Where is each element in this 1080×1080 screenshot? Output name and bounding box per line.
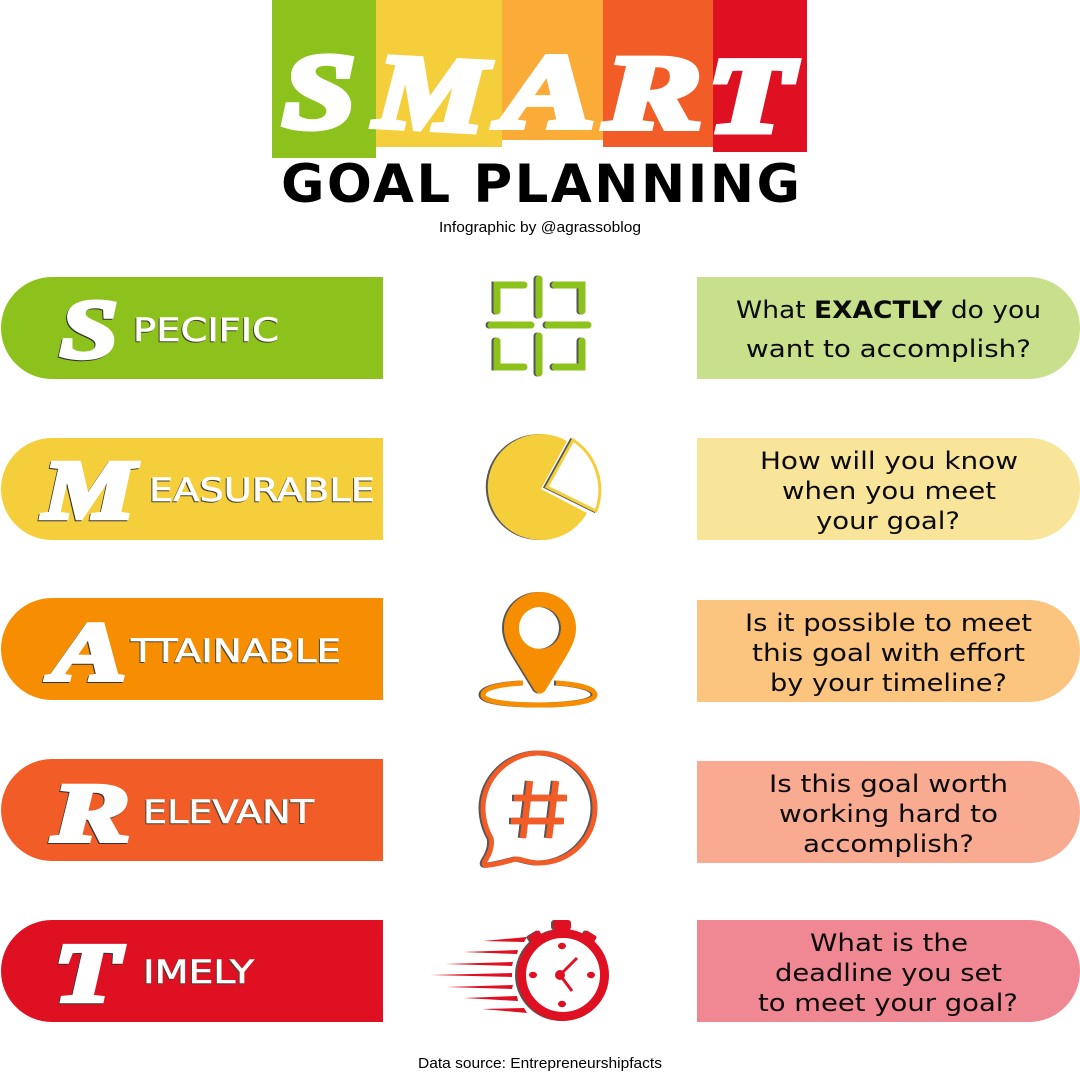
title: SMART colour blocks and lettering: T xyxy=(708,37,798,154)
panel: attainable question: by your timeline? xyxy=(770,669,1007,697)
panel: measurable question xyxy=(697,438,1080,540)
panel: attainable question: Is it possible to meet xyxy=(745,609,1032,637)
heading: goal planning: GOAL PLANNING xyxy=(281,154,800,215)
panel: attainable label: A xyxy=(45,606,126,699)
byline: Infographic by @agrassoblog xyxy=(439,219,641,236)
title: SMART colour blocks and lettering xyxy=(272,0,807,158)
panel: relevant label: ELEVANT xyxy=(143,793,315,831)
panel: timely question: to meet your goal? xyxy=(758,989,1018,1017)
panel: timely label xyxy=(1,920,383,1022)
panel: specific label xyxy=(1,277,383,379)
panel: specific question: want to accomplish? xyxy=(746,335,1031,363)
icon: pie chart xyxy=(488,434,600,540)
panel: timely question: What is the xyxy=(810,929,968,957)
panel: measurable question: when you meet xyxy=(782,477,996,505)
panel: relevant question: Is this goal worth xyxy=(769,770,1008,798)
panel: measurable label xyxy=(1,438,383,540)
panel: specific label: PECIFIC xyxy=(133,311,279,349)
panel: specific question: What EXACTLY do you xyxy=(736,296,1041,324)
panel: attainable label xyxy=(1,598,383,700)
panel: relevant question: accomplish? xyxy=(803,830,974,858)
icon: hashtag speech bubble xyxy=(483,753,595,865)
panel: relevant question xyxy=(697,761,1080,863)
panel: relevant label xyxy=(1,759,383,861)
panel: relevant label: R xyxy=(51,767,130,860)
panel: measurable question: your goal? xyxy=(816,507,960,535)
panel: timely question xyxy=(697,920,1080,1022)
panel: measurable label: EASURABLE xyxy=(149,471,375,509)
panel: attainable label: TTAINABLE xyxy=(130,632,341,670)
panel: relevant question: working hard to xyxy=(779,800,998,828)
panel: specific question xyxy=(697,277,1080,379)
panel: attainable question xyxy=(697,600,1080,702)
panel: timely label: IMELY xyxy=(143,953,255,991)
panel: timely label: T xyxy=(54,927,125,1020)
panel: measurable question: How will you know xyxy=(760,447,1018,475)
title: SMART colour blocks and lettering: M xyxy=(371,32,493,155)
footer: data source: Data source: Entrepreneurshipfacts xyxy=(418,1055,662,1072)
icon: stopwatch with speed lines xyxy=(430,920,604,1016)
panel: attainable question: this goal with effort xyxy=(752,639,1025,667)
icon: location pin xyxy=(483,592,595,705)
panel: measurable label: M xyxy=(41,444,139,537)
panel: specific label: S xyxy=(60,283,118,376)
title: SMART colour blocks and lettering: A xyxy=(493,33,595,150)
panel: timely question: deadline you set xyxy=(775,959,1002,987)
icon: target crosshair xyxy=(491,279,588,373)
title: SMART colour blocks and lettering: R xyxy=(603,34,702,151)
title: SMART colour blocks and lettering: S xyxy=(283,33,355,150)
